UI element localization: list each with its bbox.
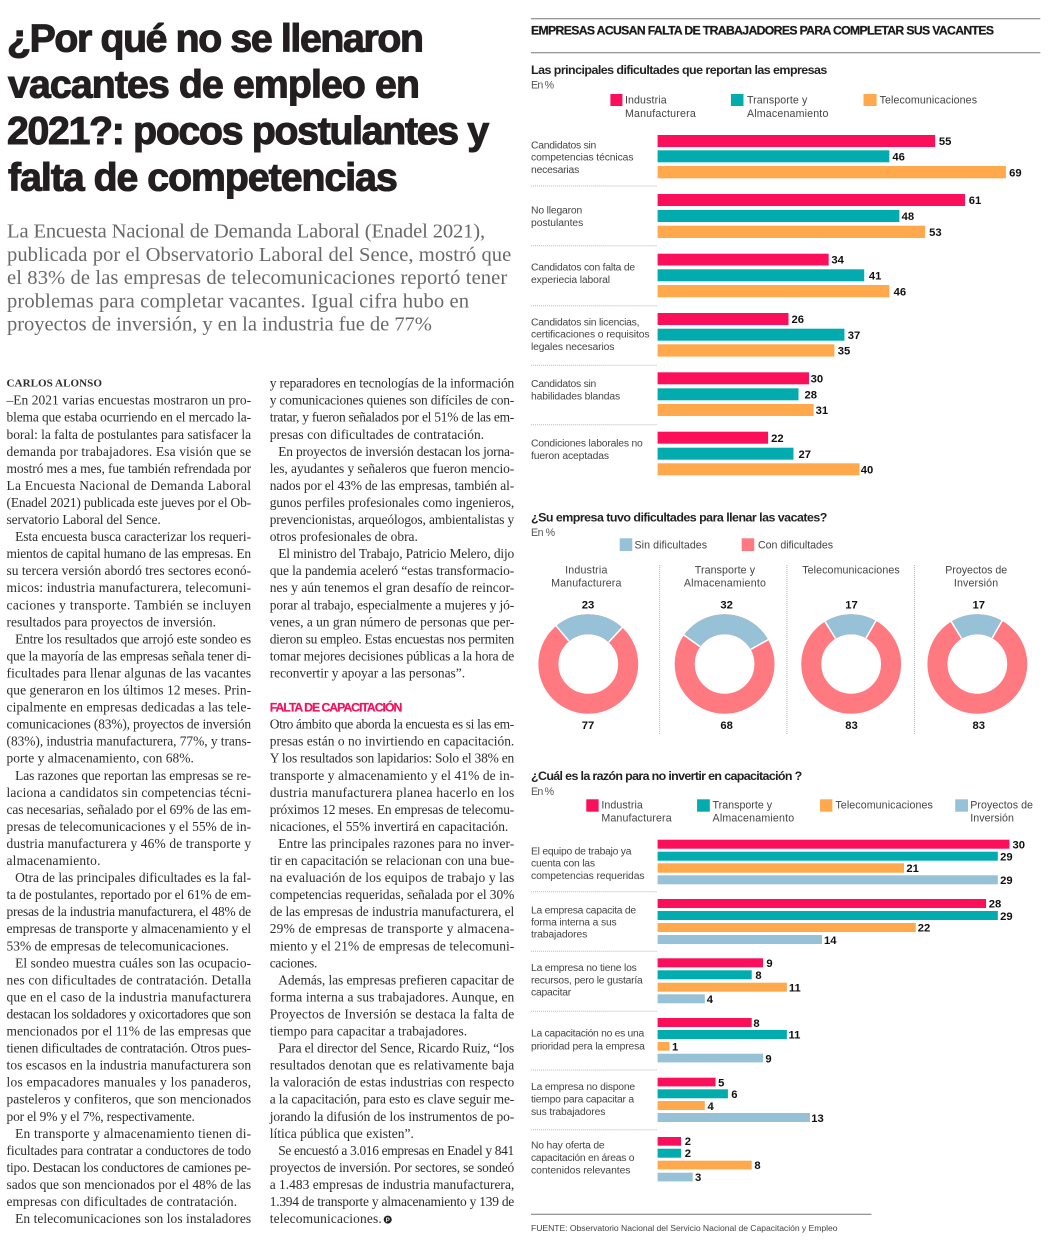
group: falta de experiencia: 41 (869, 271, 881, 282)
deck paragraph (7, 221, 511, 335)
deck paragraph: publicada por el Observatorio Laboral del Sence, mostró que (7, 244, 511, 266)
group: habilidades blandas: Candidatos sin (531, 379, 597, 390)
article column 2: Proyectos de Inversión se destaca la falta de (270, 1007, 514, 1021)
article column 2: y reparadores en tecnologías de la información (270, 376, 515, 391)
legend: four sectors: Industria (601, 799, 643, 811)
group: no llegaron postulantes: postulantes (531, 218, 583, 229)
donut: transporte y almacenamiento: 32 (720, 600, 733, 612)
group: no es prioridad (531, 1018, 800, 1065)
unit label: En % (531, 527, 556, 539)
group: no dispone tiempo: 6 (731, 1089, 737, 1101)
article column 2: telecomunicaciones. (270, 1211, 382, 1226)
group: ya cuenta con competencias: 29 (1000, 875, 1013, 887)
donut: industria manufacturera: Manufacturera (551, 578, 622, 590)
group: candidatos sin competencias: necesarias (531, 165, 579, 176)
article column 2: Entre las principales razones para no inver- (278, 836, 514, 851)
group: ya cuenta con competencias: cuenta con las (531, 859, 595, 870)
group: sin licencias (531, 313, 860, 358)
article column 1: Esta encuesta busca caracterizar los requeri- (15, 529, 251, 544)
group: ya cuenta con competencias: 21 (906, 863, 919, 875)
title: vacantes de empleo en (8, 64, 420, 107)
article column 1: mostró mes a mes, fue también refrendada por (7, 461, 252, 476)
icon: end mark: P (386, 1218, 390, 1224)
article column 2: Para el director del Sence, Ricardo Ruiz, “los (278, 1041, 514, 1056)
group: condiciones laborales (531, 432, 873, 476)
article column 1: porte y almacenamiento, con 68%. (7, 751, 194, 766)
legend: sectors (610, 94, 977, 120)
group: candidatos sin competencias: 46 (892, 152, 905, 163)
article column 2: Además, las empresas prefieren capacitar de (278, 972, 514, 987)
donut: industria manufacturera: 77 (582, 720, 594, 732)
legend: difficulty (620, 538, 833, 551)
article column 2: transporte y almacenamiento y el 41% de in- (270, 768, 514, 783)
article column 1: En telecomunicaciones son los instaladores (15, 1211, 251, 1226)
group: no hay oferta: No hay oferta de (531, 1141, 605, 1152)
group: capacita internamente: trabajadores (531, 930, 587, 941)
icon: end mark (384, 1216, 392, 1224)
group: no dispone tiempo: La empresa no dispone (531, 1082, 635, 1093)
group: ya cuenta con competencias: El equipo de trabajo ya (531, 847, 632, 858)
article column 2: les, ayudantes y señaleros que fueron mencio- (270, 461, 514, 476)
article column 1: Las razones que reportan las empresas se re- (15, 768, 251, 783)
deck paragraph: el 83% de las empresas de telecomunicaciones reportó tener (7, 267, 507, 289)
group: ya cuenta con competencias (531, 839, 1025, 887)
article column 1: pasteleros y confiteros, que son mencionados (7, 1092, 251, 1107)
title: 2021?: pocos postulantes y (7, 110, 489, 153)
group: no llegaron postulantes: 48 (902, 211, 914, 223)
article column 1: que generaron en los últimos 12 meses. Prin- (7, 683, 251, 697)
legend: four sectors: Inversión (970, 812, 1014, 824)
group: candidatos sin competencias: 69 (1009, 167, 1022, 179)
group: falta de experiencia: 46 (894, 286, 906, 298)
article column 2: jorando la difusión de los instrumentos de po- (269, 1109, 514, 1124)
group: capacita internamente: 22 (918, 923, 930, 935)
subheading: falta de capacitación: FALTA DE CAPACITACIÓN (270, 699, 402, 714)
donut: telecomunicaciones (796, 565, 906, 732)
legend: sectors: Industria (625, 95, 667, 107)
article column 2: En proyectos de inversión destacan los jorna- (278, 444, 514, 459)
article column 1: destacan los soldadores y oxicortadores que son (7, 1007, 251, 1021)
article column 2: caciones. (270, 955, 317, 970)
group: capacita internamente: forma interna a sus (531, 918, 617, 929)
article column 1: ficultades para llenar algunas de las vacantes (7, 666, 251, 680)
group: condiciones laborales: 40 (861, 465, 873, 476)
article column 1: (Enadel 2021) publicada este jueves por el Ob- (7, 495, 251, 510)
group: no llegaron postulantes (531, 194, 981, 239)
group: condiciones laborales: 27 (799, 449, 811, 461)
group: no hay oferta: 8 (754, 1160, 761, 1172)
legend: four sectors: Almacenamiento (713, 812, 794, 824)
legend: sectors: Telecomunicaciones (880, 95, 977, 107)
group: no tiene recursos: 11 (789, 982, 801, 994)
donut: proyectos de inversión: 83 (972, 720, 985, 732)
group: sin licencias: 35 (838, 346, 850, 358)
article column 2: 29% de empresas de transporte y almacena- (270, 921, 514, 936)
group: no hay oferta: 2 (685, 1136, 691, 1148)
article column 1: dustria manufacturera y 46% de transporte y (7, 836, 251, 851)
group: no dispone tiempo (531, 1077, 824, 1125)
group: condiciones laborales: 22 (771, 433, 784, 445)
article column 1: CARLOS ALONSO (7, 378, 102, 390)
article column 1: que la mayoría de las empresas señala tener di- (7, 648, 251, 663)
article column 1: tipo. Destacan los conductores de camiones pe- (7, 1160, 251, 1175)
donut: industria manufacturera: 23 (582, 600, 594, 612)
group: no hay oferta: 2 (685, 1148, 691, 1160)
article column 2: dieron su empleo. Estas encuestas nos permiten (270, 631, 515, 646)
article column 2: proyectos de inversión. Por sectores, se sondeó (270, 1160, 515, 1175)
group: sin licencias: Candidatos sin licencias, (531, 317, 640, 328)
article column 1: presas de la industria manufacturera, el 48% de (7, 904, 251, 919)
article column 2: resultados denotan que es relativamente baja (270, 1058, 514, 1073)
article column 2: forma interna a sus trabajadores. Aunque, en (270, 989, 515, 1004)
article column 2: porar al trabajo, especialmente a mujeres y jó- (270, 597, 514, 612)
article column 1: En transporte y almacenamiento tienen di- (15, 1126, 251, 1141)
legend: four sectors: Proyectos de (970, 799, 1033, 811)
article column 2: reconvertir y apoyar a las personas”. (270, 666, 465, 680)
article column 2: Otro ámbito que aborda la encuesta es si las em- (270, 717, 514, 732)
group: no tiene recursos: recursos, pero le gustaría (531, 975, 643, 986)
group: no tiene recursos: 8 (755, 970, 762, 982)
article column 1: servatorio Laboral del Sence. (7, 512, 161, 527)
article column 1: Entre los resultados que arrojó este sondeo es (15, 631, 251, 646)
article column 2: miento y el 21% de empresas de telecomuni- (270, 938, 514, 953)
article column 1: micos: industria manufacturera, telecomuni- (7, 580, 251, 595)
article column 1: boral: la falta de postulantes para satisfacer la (7, 427, 251, 442)
group: ya cuenta con competencias: competencias requeridas (531, 871, 645, 882)
legend: four sectors (586, 799, 1033, 824)
article column 1: nes con dificultades de contratación. Detalla (7, 972, 251, 987)
group: no tiene recursos: capacitar (531, 987, 572, 998)
article column 2: gunos perfiles profesionales como ingenieros, (270, 495, 514, 510)
article column 2: venes, a un gran número de personas que per- (270, 614, 514, 629)
group: capacita internamente: 14 (824, 935, 837, 947)
panel: principal difficulties chart (531, 63, 1022, 476)
group: habilidades blandas: 31 (816, 405, 828, 417)
donut: telecomunicaciones: 83 (845, 720, 858, 732)
article column 1: blema que estaba ocurriendo en el mercado la- (7, 410, 251, 425)
article column 1: empresas con dificultades de contratación. (7, 1194, 237, 1209)
article column 1: resultados para proyectos de inversión. (7, 614, 216, 629)
deck paragraph: problemas para completar vacantes. Igual cifra hubo en (7, 291, 469, 312)
group: sin licencias: certificaciones o requisitos (531, 330, 650, 341)
legend: difficulty: Sin dificultades (634, 539, 707, 551)
article column 1: cas necesarias, señalado por el 69% de las em- (7, 802, 251, 817)
article column 1: sados que son mencionados por el 48% de las (7, 1177, 251, 1192)
group: no hay oferta: 3 (695, 1172, 701, 1184)
legend: difficulty: Con dificultades (758, 539, 833, 551)
article column 2: a la capacitación, para esto es clave seguir me- (270, 1092, 514, 1107)
article column 2: presas están o no invirtiendo en capacitación. (270, 734, 514, 749)
group: no tiene recursos (531, 958, 801, 1006)
article column 1: ficultades para contratar a conductores de todo (7, 1143, 251, 1158)
article column 2: El ministro del Trabajo, Patricio Melero, dijo (278, 546, 515, 561)
article column 1: comunicaciones (83%), proyectos de inversión (7, 717, 251, 732)
group: falta de experiencia: Candidatos con falta de (531, 263, 635, 274)
donut: proyectos de inversión: 17 (972, 600, 985, 612)
title: ¿Por qué no se llenaron (7, 18, 424, 60)
article column 1: tienen dificultades de contratación. Otros pues- (7, 1041, 251, 1056)
group: no dispone tiempo: sus trabajadores (531, 1107, 605, 1118)
group: habilidades blandas: 30 (811, 374, 823, 385)
article column 1: demanda por trabajadores. Esa visión que se (7, 444, 251, 459)
heading: donuts: ¿Su empresa tuvo dificultades para llenar las vacates? (531, 510, 827, 524)
group: habilidades blandas: 28 (805, 390, 817, 401)
article column 2: prevencionistas, arqueólogos, ambientalistas y (270, 512, 515, 527)
article column 2: tomar mejores decisiones públicas a la hora de (270, 648, 514, 663)
group: no es prioridad: 11 (788, 1030, 800, 1042)
article column 1: empresas de transporte y almacenamiento y el (7, 921, 251, 936)
article column 1: mientos de capital humano de las empresas. En (7, 546, 251, 561)
article column 1: su tercera versión abordó tres sectores econó- (7, 563, 251, 578)
group: falta de experiencia: experiecia laboral (531, 275, 610, 286)
group: no hay oferta: capacitación en áreas o (531, 1153, 635, 1164)
heading: training: ¿Cuál es la razón para no invertir en capacitación ? (531, 769, 802, 783)
article column 2: tratar, y fueron señalados por el 51% de las em- (270, 410, 514, 425)
article column 2: Y los resultados son lapidarios: Solo el 38% en (270, 751, 515, 766)
donut: transporte y almacenamiento (669, 565, 780, 732)
group: no dispone tiempo: 5 (718, 1077, 724, 1089)
group: no hay oferta: contenidos relevantes (531, 1165, 630, 1176)
group: no es prioridad: 8 (753, 1018, 760, 1030)
article column 1 (6, 378, 252, 1226)
group: no llegaron postulantes: 53 (929, 227, 942, 239)
legend: sectors: Transporte y (747, 95, 808, 107)
article column 1: presas de telecomunicaciones y el 55% de in- (7, 819, 251, 834)
panel: training reasons chart (531, 769, 1033, 1184)
donut: telecomunicaciones: Telecomunicaciones (802, 565, 900, 577)
group: sin licencias: 37 (848, 330, 860, 342)
group: capacita internamente (531, 899, 1013, 947)
donut: proyectos de inversión: Proyectos de (945, 565, 1007, 577)
heading: difficulties: Las principales dificultades que reportan las empresas (531, 63, 827, 77)
donut: industria manufacturera: Industria (565, 565, 607, 577)
group: sin licencias: legales necesarios (531, 342, 614, 353)
article column 2: que la pandemia aceleró “estas transformacio- (270, 563, 514, 578)
article column 1: Otra de las principales dificultades es la fal- (15, 870, 251, 885)
article column 2: competencias requeridas, señalada por el 30% (270, 887, 514, 902)
group: no es prioridad: La capacitación no es una (531, 1028, 644, 1039)
group: no dispone tiempo: tiempo para capacitar a (531, 1094, 634, 1105)
group: no tiene recursos: La empresa no tiene los (531, 963, 637, 974)
article column 1: que en el caso de la industria manufacturera (7, 989, 251, 1004)
legend: four sectors: Transporte y (713, 799, 773, 811)
group: sin licencias: 26 (791, 314, 804, 326)
source note: FUENTE: Observatorio Nacional del Servicio Nacional de Capacitación y Empleo (531, 1223, 838, 1233)
group: candidatos sin competencias: 55 (939, 136, 951, 148)
group: no dispone tiempo: 13 (811, 1113, 824, 1125)
group: capacita internamente: 29 (1000, 911, 1013, 923)
article column 1: laciona a candidatos sin competencias técni- (7, 785, 251, 800)
title (7, 18, 489, 199)
group: condiciones laborales: Condiciones laborales no (531, 439, 643, 450)
article column 1: mencionados por el 11% de las empresas que (7, 1024, 251, 1038)
article column 2: tiempo para capacitar a trabajadores. (270, 1024, 467, 1038)
group: falta de experiencia (531, 254, 906, 298)
deck paragraph: proyectos de inversión, y en la industria fue de 77% (7, 314, 432, 335)
group: no tiene recursos: 9 (766, 958, 773, 970)
donut: transporte y almacenamiento: Transporte y (695, 565, 756, 577)
donut: telecomunicaciones: 17 (845, 600, 858, 612)
article column 1: cipalmente en empresas dedicadas a las tele- (7, 700, 251, 715)
article column 2: y comunicaciones quienes son difíciles de con- (270, 393, 514, 408)
group: no es prioridad: prioridad pera la empresa (531, 1041, 645, 1052)
legend: four sectors: Telecomunicaciones (835, 799, 933, 811)
article column 2: próximos 12 meses. En empresas de telecomu- (270, 802, 514, 817)
group: habilidades blandas (531, 372, 828, 417)
group: no es prioridad: 1 (672, 1042, 678, 1054)
legend: sectors: Manufacturera (625, 108, 696, 120)
group: candidatos sin competencias: Candidatos sin (531, 140, 597, 151)
group: no llegaron postulantes: 61 (969, 195, 981, 207)
graphic title: EMPRESAS ACUSAN FALTA DE TRABAJADORES PARA COMPLETAR SUS VACANTES (531, 23, 994, 37)
group: ya cuenta con competencias: 29 (1000, 851, 1013, 863)
group: capacita internamente: 28 (989, 899, 1001, 911)
article column 2: de las empresas de industria manufacturera, el (270, 904, 515, 919)
article column 2: tir en capacitación se relacionan con una bue- (270, 853, 514, 868)
group: no es prioridad: 9 (765, 1053, 772, 1065)
group: habilidades blandas: habilidades blandas (531, 391, 620, 402)
article column 1: caciones y transporte. También se incluyen (7, 597, 251, 612)
article column 1: La Encuesta Nacional de Demanda Laboral (7, 478, 251, 493)
donut: industria manufacturera (532, 565, 644, 732)
article column 1: los empacadores manuales y los panaderos, (7, 1075, 251, 1090)
group: falta de experiencia: 34 (831, 255, 845, 267)
article column 1: por el 9% y el 7%, respectivamente. (7, 1109, 195, 1124)
article column 2: otros profesionales de obra. (270, 529, 418, 544)
article column 2: presas con dificultades de contratación. (270, 427, 484, 442)
group: no hay oferta (531, 1136, 761, 1184)
article column 2: nes y aún tenemos el gran desafío de reincor- (270, 580, 514, 595)
article column 1: tos escasos en la industria manufacturera son (7, 1058, 251, 1073)
unit label: En % (531, 786, 555, 798)
article column 1: 53% de empresas de telecomunicaciones. (7, 938, 229, 953)
donut: proyectos de inversión: Inversión (954, 578, 998, 590)
title: falta de competencias (8, 157, 398, 199)
group: candidatos sin competencias (531, 135, 1022, 179)
article column 1: (83%), industria manufacturera, 77%, y trans- (7, 734, 251, 749)
legend: four sectors: Manufacturera (601, 812, 672, 824)
group: no dispone tiempo: 4 (708, 1101, 715, 1113)
group: ya cuenta con competencias: 30 (1012, 839, 1025, 851)
article column 2: nados por el 43% de las empresas, también al- (270, 478, 514, 493)
article column 2: dustria manufacturera planea hacerlo en los (270, 785, 514, 800)
deck paragraph: La Encuesta Nacional de Demanda Laboral (Enadel 2021), (7, 221, 485, 243)
group: candidatos sin competencias: competencias técnicas (531, 153, 633, 164)
article column 2: 1.394 de transporte y almacenamiento y 139 de (270, 1194, 514, 1209)
article column 1: El sondeo muestra cuáles son las ocupacio- (15, 955, 251, 970)
panel: donut charts (531, 510, 1032, 735)
article column 1: ta de postulantes, reportado por el 61% de em- (7, 887, 251, 902)
group: no llegaron postulantes: No llegaron (531, 205, 583, 216)
donut: transporte y almacenamiento: 68 (720, 720, 733, 732)
donut: proyectos de inversión (922, 565, 1032, 732)
article column 1: almacenamiento. (7, 853, 100, 868)
article column 2: Se encuestó a 3.016 empresas en Enadel y 841 (278, 1143, 514, 1158)
group: condiciones laborales: fueron aceptadas (531, 451, 609, 462)
group: capacita internamente: La empresa capacita de (531, 905, 636, 916)
unit label: En % (531, 80, 555, 92)
article column 2: a 1.483 empresas de industria manufacturera, (270, 1177, 514, 1192)
donut: transporte y almacenamiento: Almacenamiento (684, 578, 766, 590)
article column 2: na evaluación de los equipos de trabajo y las (270, 870, 514, 885)
article column 2 (269, 376, 515, 1226)
article column 2: nicaciones, el 55% invertirá en capacitación. (270, 819, 508, 834)
group: no tiene recursos: 4 (707, 994, 714, 1006)
article column 2: lítica pública que existen”. (270, 1126, 414, 1141)
legend: sectors: Almacenamiento (747, 108, 828, 120)
article column 1: –En 2021 varias encuestas mostraron un pro- (6, 393, 251, 408)
article column 2: la valoración de estas industrias con respecto (270, 1075, 515, 1090)
